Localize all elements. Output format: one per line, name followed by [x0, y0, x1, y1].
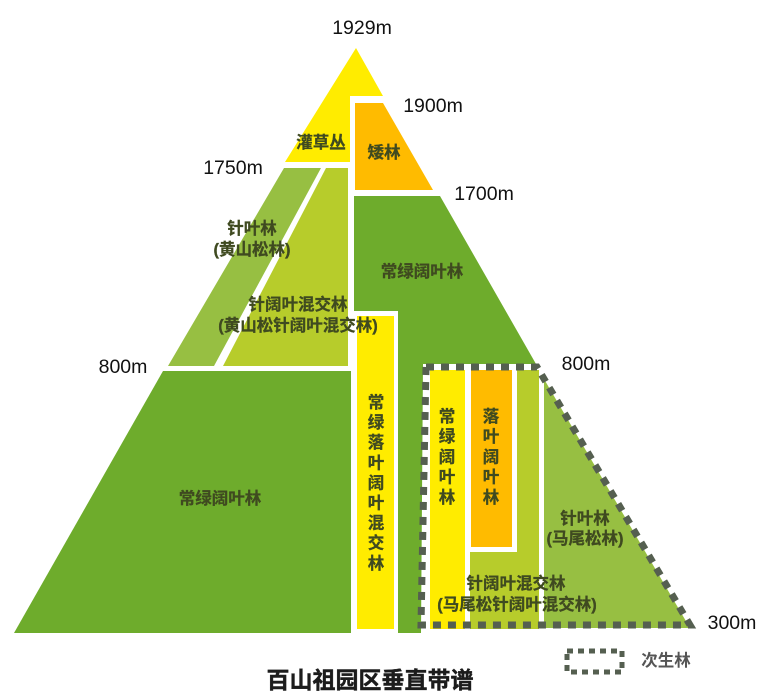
label: conifer forest, Huangshan pine: 针叶林	[227, 219, 277, 238]
zone: lower evergreen broadleaf forest	[14, 371, 351, 633]
label: secondary conifer forest, masson pine: 针叶林	[560, 509, 610, 528]
zone: evergreen deciduous mixed forest strip	[357, 316, 394, 629]
altitude labels: 1929m	[332, 17, 392, 39]
label: evergreen deciduous mixed forest: 常	[368, 393, 384, 412]
label: lower evergreen broadleaf forest: 常绿阔叶林	[179, 488, 262, 508]
label: mixed forest, Huangshan pine	[218, 294, 378, 335]
label: evergreen deciduous mixed forest: 叶	[368, 453, 385, 472]
label: secondary evergreen broadleaf forest: 阔	[439, 447, 455, 466]
label: conifer forest, Huangshan pine: (黄山松林)	[214, 240, 290, 259]
zone: secondary conifer forest, masson pine	[544, 379, 690, 628]
label: dwarf forest: 矮林	[368, 143, 401, 162]
legend: secondary forest	[567, 651, 691, 672]
label: evergreen deciduous mixed forest: 阔	[368, 473, 384, 492]
label: secondary deciduous broadleaf forest: 阔	[483, 447, 499, 466]
label: secondary deciduous broadleaf forest: 落	[483, 407, 500, 426]
label: secondary evergreen broadleaf forest: 绿	[439, 426, 456, 446]
altitude labels: 1900m	[403, 95, 463, 117]
label: secondary evergreen broadleaf forest: 叶	[439, 468, 456, 487]
label: evergreen deciduous mixed forest: 林	[368, 554, 385, 573]
label: evergreen deciduous mixed forest: 落	[368, 433, 385, 452]
label: secondary mixed forest, masson pine: 针阔叶混交林	[466, 573, 566, 593]
title: 百山祖园区垂直带谱	[266, 667, 474, 693]
label: secondary deciduous broadleaf forest: 叶	[483, 468, 500, 487]
altitude labels: 800m	[562, 353, 610, 375]
zone: shrub grass	[285, 48, 383, 162]
zone: conifer forest, Huangshan pine	[168, 168, 321, 366]
zone: secondary evergreen broadleaf forest	[430, 370, 465, 629]
zone: mixed forest, Huangshan pine	[223, 168, 348, 366]
altitude labels: 1700m	[454, 183, 514, 205]
label: mixed forest, Huangshan pine: 针阔叶混交林	[248, 294, 348, 314]
zone: upper evergreen broadleaf forest	[354, 196, 536, 633]
label: evergreen deciduous mixed forest: 混	[368, 514, 385, 533]
secondary forest dashed outline	[421, 367, 690, 625]
altitude labels: 1750m	[203, 157, 263, 179]
label: conifer forest, Huangshan pine	[214, 219, 290, 259]
altitude labels: 300m	[708, 612, 756, 634]
label: shrub grass: 灌草丛	[296, 133, 346, 152]
altitude labels	[99, 17, 756, 634]
label: secondary conifer forest, masson pine: (马尾松林)	[546, 529, 624, 548]
zone: secondary deciduous broadleaf forest	[471, 370, 512, 547]
label: evergreen deciduous mixed forest: 叶	[368, 494, 385, 512]
legend: secondary forest: 次生林	[641, 651, 691, 670]
label: secondary mixed forest, masson pine	[437, 573, 597, 614]
label: secondary conifer forest, masson pine	[546, 509, 624, 548]
label: secondary evergreen broadleaf forest: 林	[439, 488, 456, 507]
label: mixed forest, Huangshan pine: (黄山松针阔叶混交林)	[218, 315, 378, 335]
zone: dwarf forest	[355, 103, 433, 190]
label: upper evergreen broadleaf forest: 常绿阔叶林	[381, 261, 464, 281]
label: secondary deciduous broadleaf forest: 叶	[483, 427, 500, 446]
label: evergreen deciduous mixed forest: 交	[368, 533, 384, 553]
altitude labels: 800m	[99, 356, 147, 378]
label: secondary deciduous broadleaf forest: 林	[483, 488, 500, 507]
label: evergreen deciduous mixed forest: 绿	[368, 412, 385, 432]
zone: secondary mixed forest, masson pine	[470, 370, 539, 629]
label: secondary evergreen broadleaf forest: 常	[439, 407, 455, 426]
label: secondary mixed forest, masson pine: (马尾松针阔叶混交林)	[437, 594, 597, 614]
